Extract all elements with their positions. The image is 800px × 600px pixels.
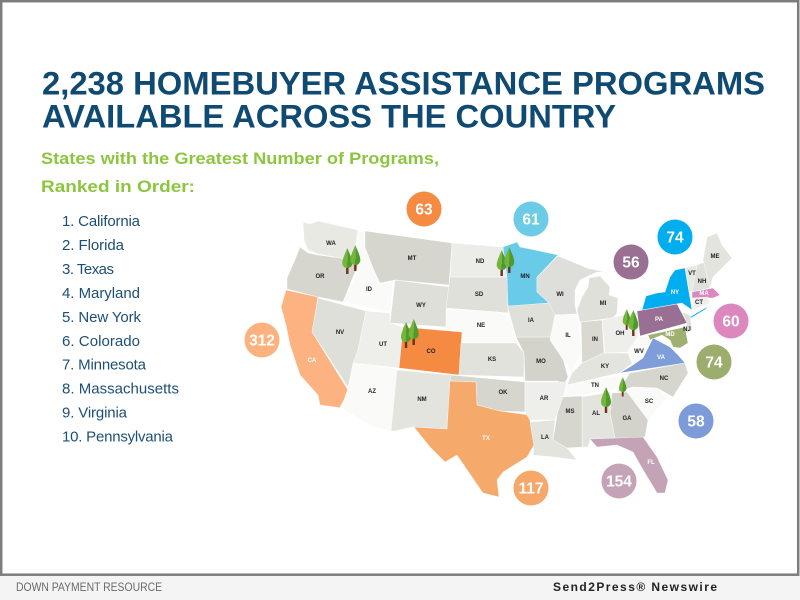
state labels: ME — [710, 254, 720, 260]
state labels: AR — [540, 396, 549, 402]
callout: Virginia 58 — [678, 404, 714, 438]
state labels: VT — [688, 271, 696, 277]
ranked list: 3. Texas — [62, 261, 114, 278]
state labels: WV — [634, 349, 644, 355]
subtitle: States with the Greatest Number of Programs, — [41, 149, 439, 168]
Wisconsin with upper peninsula — [537, 256, 605, 315]
callout: California 312: 312 — [249, 332, 275, 350]
state labels: SD — [475, 292, 484, 298]
callout: New York 74 — [658, 220, 692, 254]
state labels: MO — [536, 359, 546, 365]
state labels: CT — [695, 300, 703, 306]
callout: Florida 154 — [602, 464, 636, 498]
state labels — [308, 241, 720, 466]
state shapes — [281, 221, 732, 497]
state labels: ND — [476, 259, 485, 265]
state labels: FL — [647, 460, 655, 466]
state labels: IL — [565, 333, 571, 339]
state labels: ID — [366, 287, 373, 293]
state labels: AZ — [368, 389, 376, 395]
title: 2,238 HOMEBUYER ASSISTANCE PROGRAMS — [42, 66, 765, 102]
state labels: OK — [498, 390, 508, 396]
footer right credit: Send2Press® Newswire — [553, 580, 717, 594]
callout: Florida 154: 154 — [606, 474, 632, 490]
state labels: SC — [645, 399, 654, 405]
state labels: WA — [326, 241, 336, 247]
state labels: WY — [416, 303, 426, 309]
callout: Pennsylvania 56: 56 — [622, 254, 640, 272]
callout: California 312 — [244, 322, 280, 358]
state labels: KS — [488, 357, 496, 363]
state labels: KY — [601, 364, 609, 370]
callout: Massachusetts 60: 60 — [722, 314, 740, 330]
state labels: TN — [591, 383, 599, 389]
callout: Virginia 58: 58 — [687, 414, 705, 430]
ranked list: 1. California — [62, 213, 141, 230]
ranked list: 6. Colorado — [62, 333, 140, 350]
state labels: IA — [528, 318, 535, 324]
state labels: WI — [556, 292, 564, 298]
state labels: GA — [622, 416, 632, 422]
state labels: NC — [660, 376, 669, 382]
state labels: IN — [592, 337, 598, 343]
state labels: MA — [699, 291, 709, 297]
state labels: CA — [308, 358, 317, 364]
state labels: OH — [616, 331, 624, 337]
state labels: NE — [477, 323, 485, 329]
state labels: MI — [600, 301, 607, 307]
state labels: VA — [657, 355, 666, 361]
title: AVAILABLE ACROSS THE COUNTRY — [42, 98, 616, 134]
ranked list: 8. Massachusetts — [62, 380, 179, 398]
ranked list: 9. Virginia — [62, 404, 128, 422]
footer left credit: DOWN PAYMENT RESOURCE — [16, 582, 162, 594]
state labels: AL — [592, 411, 600, 417]
state labels: MS — [566, 409, 574, 415]
icon: trees — [342, 245, 638, 413]
callout: Massachusetts 60 — [714, 304, 748, 338]
callout: Minnesota 61 — [514, 202, 548, 236]
ranked list: 2. Florida — [62, 237, 125, 254]
US map — [281, 221, 732, 497]
ranked list: 7. Minnesota — [62, 356, 147, 374]
state labels: NY — [671, 290, 679, 296]
state labels: UT — [379, 342, 387, 348]
state labels: LA — [541, 435, 550, 441]
state labels: MN — [520, 274, 530, 280]
callout: Colorado 63: 63 — [415, 202, 433, 218]
state labels: MD — [665, 332, 675, 338]
callout: Maryland 74 — [696, 344, 732, 380]
state labels: NJ — [683, 327, 691, 333]
subtitle: Ranked in Order: — [41, 177, 195, 196]
state labels: NV — [336, 330, 344, 336]
state labels: NM — [417, 397, 427, 403]
ranked list — [62, 213, 179, 446]
state labels: CO — [426, 349, 436, 355]
ranked list: 5. New York — [62, 309, 142, 326]
state labels: MT — [408, 256, 417, 262]
callout: Maryland 74: 74 — [705, 354, 723, 372]
subtitle — [41, 149, 439, 196]
state labels: PA — [655, 317, 664, 323]
callout: Colorado 63 — [406, 192, 442, 226]
ranked list: 10. Pennsylvania — [62, 428, 174, 446]
ranked list: 4. Maryland — [62, 285, 140, 302]
title — [42, 66, 765, 134]
callout: Minnesota 61: 61 — [522, 212, 540, 228]
state labels: OR — [316, 274, 325, 280]
state labels: TX — [482, 436, 490, 442]
callout: New York 74: 74 — [666, 230, 684, 246]
callout: Texas 117: 117 — [518, 480, 544, 498]
callout: Pennsylvania 56 — [614, 244, 648, 280]
state labels: NH — [698, 279, 706, 285]
callout: Texas 117 — [514, 470, 548, 506]
